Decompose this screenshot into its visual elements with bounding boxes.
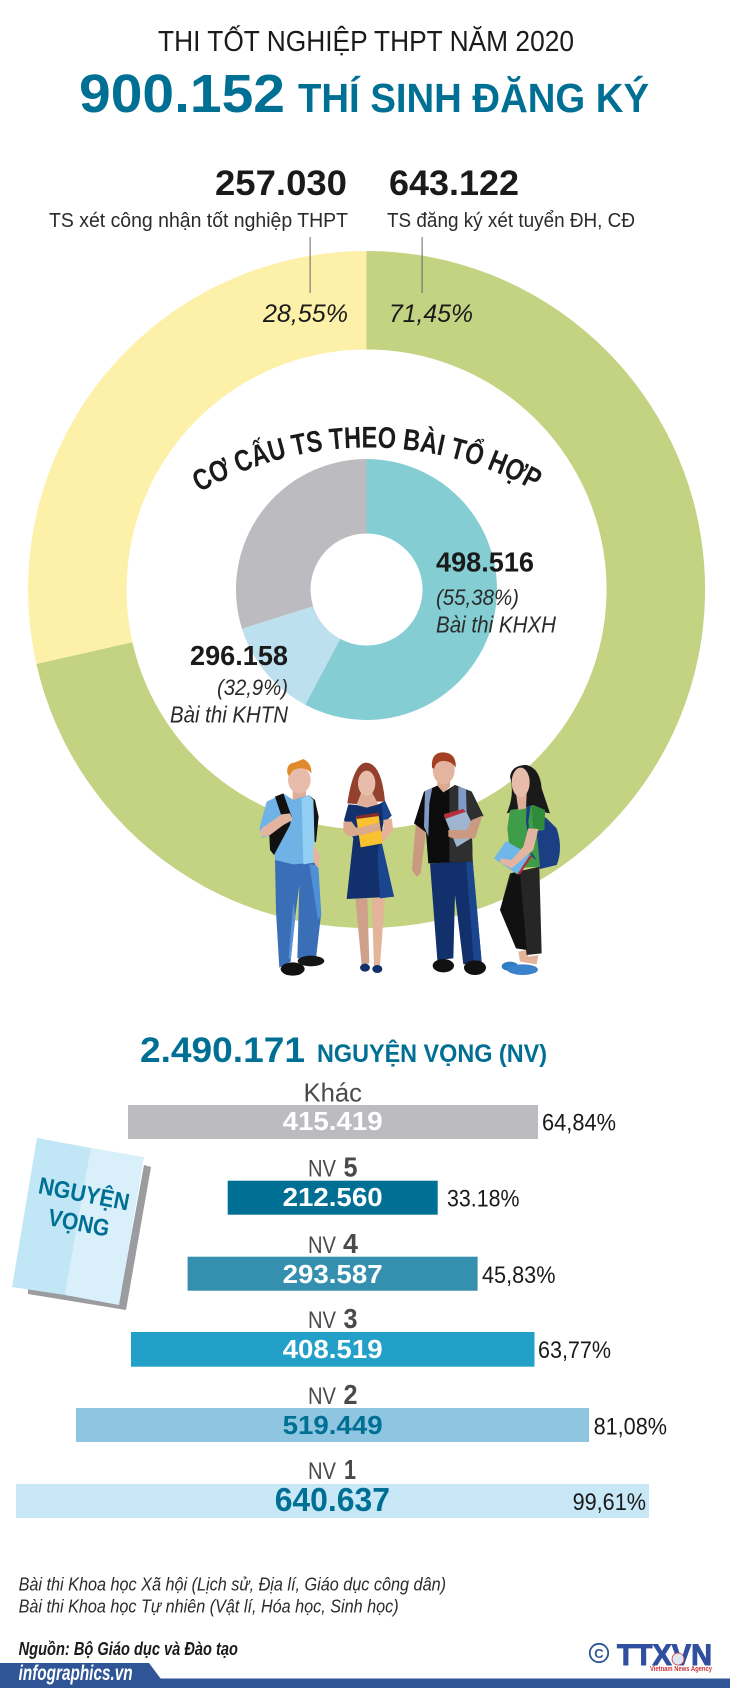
notes: Bài thi Khoa học Tự nhiên (Vật lí, Hóa học, Sinh học) (19, 1597, 399, 1617)
donut chart: candidates by purpose (28, 251, 705, 928)
slice: other (236, 459, 366, 629)
label: KHTN: 296.158 (190, 640, 288, 671)
bar: NV 1: NV (308, 1458, 336, 1485)
bar: NV 5: 33.18% (447, 1186, 520, 1213)
inner donut chart: exam combinations (236, 459, 497, 720)
bar: NV 1: 99,61% (573, 1489, 646, 1516)
section heading: total wishes: 2.490.171 (140, 1031, 305, 1070)
icon: wish booklet: VỌNG (46, 1204, 112, 1243)
slice: KHXH (305, 459, 497, 720)
title: THÍ SINH ĐĂNG KÝ (298, 75, 649, 121)
bar: NV 4: 45,83% (482, 1262, 556, 1289)
bar: Khác (128, 1078, 616, 1139)
student 4 (494, 765, 560, 975)
bar: NV 4: NV (308, 1232, 336, 1259)
source: Nguồn: Bộ Giáo dục và Đào tạo (19, 1639, 238, 1659)
stat: 643.122 (387, 164, 635, 328)
logo: TTXVN: TTXVN (617, 1639, 712, 1672)
section heading: total wishes (140, 1031, 547, 1070)
label: KHTN: (32,9%) (217, 675, 288, 700)
icon: wish booklet (12, 1138, 151, 1310)
title (79, 24, 649, 124)
footer band (0, 1662, 730, 1688)
curved heading: exam structure: CƠ CẤU TS THEO BÀI TỔ HỢP (193, 426, 542, 490)
title: THI TỐT NGHIỆP THPT NĂM 2020 (158, 24, 574, 58)
label: KHXH (436, 547, 556, 638)
slice: university admission 71,45% (36, 251, 705, 928)
stat: 257.030 (49, 164, 348, 328)
slice: KHTN (242, 606, 340, 705)
bar: NV 1 (16, 1454, 649, 1518)
label: KHXH: Bài thi KHXH (436, 612, 556, 638)
section heading: total wishes: NGUYỆN VỌNG (NV) (317, 1038, 547, 1068)
logo: TTXVN: C (594, 1646, 604, 1661)
bar: NV 5 (228, 1152, 519, 1215)
illustration: four students (259, 752, 560, 976)
logo: TTXVN: Vietnam News Agency (650, 1666, 712, 1673)
bar: NV 3: 408.519 (283, 1334, 383, 1364)
label: KHXH: (55,38%) (436, 585, 519, 610)
label: KHTN (170, 640, 288, 728)
label: KHTN: Bài thi KHTN (170, 702, 288, 728)
notes (19, 1575, 446, 1617)
bar: NV 2: 519.449 (283, 1410, 383, 1440)
stat: 257.030: TS xét công nhận tốt nghiệp THPT (49, 210, 348, 232)
bar: NV 2: NV (308, 1383, 336, 1410)
bar: NV 3 (131, 1303, 611, 1367)
bar: NV 2: 2 (344, 1379, 358, 1410)
bar: NV 5: 212.560 (283, 1182, 383, 1212)
stat: 257.030: 257.030 (215, 164, 347, 203)
icon: wish booklet: NGUYỆN (36, 1171, 132, 1217)
bar: NV 5: NV (308, 1156, 336, 1183)
bar: Khác: 64,84% (542, 1110, 616, 1137)
slice: graduation recognition 28,55% (28, 251, 367, 664)
title: 900.152 (79, 64, 285, 124)
stat: 257.030: 28,55% (262, 300, 348, 328)
notes: Bài thi Khoa học Xã hội (Lịch sử, Địa lí, Giáo dục công dân) (19, 1575, 446, 1595)
bar: NV 3: NV (308, 1307, 336, 1334)
footer band: infographics.vn (19, 1662, 133, 1685)
bar: NV 3: 3 (344, 1303, 358, 1334)
bar: NV 2 (76, 1379, 667, 1442)
bar: NV 4: 293.587 (283, 1259, 383, 1289)
student 1 (259, 759, 324, 976)
stat: 643.122: 71,45% (389, 300, 473, 328)
bar: NV 1: 1 (344, 1454, 356, 1485)
bar: NV 1: 640.637 (275, 1481, 390, 1518)
bar: Khác: Khác (304, 1078, 362, 1108)
bar: NV 4 (188, 1228, 556, 1291)
bar: NV 5: 5 (344, 1152, 358, 1183)
bar: Khác: 415.419 (283, 1106, 383, 1136)
bar: NV 3: 63,77% (538, 1337, 611, 1364)
label: KHXH: 498.516 (436, 547, 534, 578)
bar: NV 4: 4 (343, 1228, 358, 1259)
stat: 643.122: 643.122 (389, 164, 519, 203)
student 3 (412, 752, 486, 975)
student 2 (343, 763, 394, 973)
stat: 643.122: TS đăng ký xét tuyển ĐH, CĐ (387, 210, 635, 232)
bar: NV 2: 81,08% (594, 1414, 667, 1440)
